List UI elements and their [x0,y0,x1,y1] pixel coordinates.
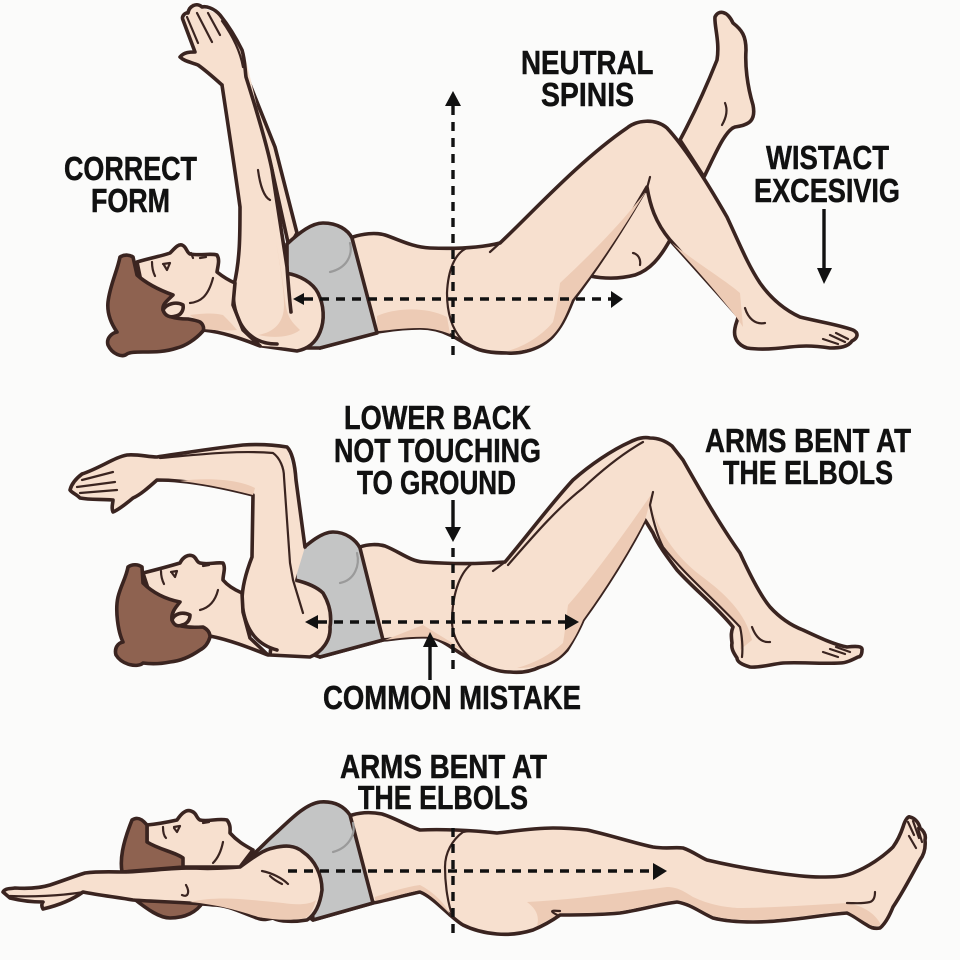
down arrow, figure 2 [445,500,461,542]
finger and arm lines [77,452,303,613]
figure 3: lying flat [3,802,925,934]
arm outline [70,445,305,650]
shoulder [270,580,331,657]
far arm [247,77,297,247]
label: correct form: FORM [91,182,170,219]
label: arms bent at the elbols, lower: THE ELBOLS [358,779,528,816]
jaw and face details [152,253,213,303]
arm fill [70,445,305,650]
head and neck [137,245,260,346]
ear [172,613,190,626]
hip and leg lines [452,442,850,660]
figure 2: common mistake [70,438,862,672]
hip, rib and foot details [447,177,848,344]
forearm shading [180,479,255,495]
horizontal axis, figure 3 [288,863,667,880]
arm outline [180,5,291,344]
finger and elbow lines [187,13,270,200]
hip, ankle and toe details [445,821,922,917]
far raised leg [680,12,754,177]
arm shading [258,205,300,337]
hair back [121,818,183,872]
label: lower back not touching to ground: NOT TOUCHING [334,432,541,469]
bra fold [340,553,358,583]
down arrow, figure 1 [817,209,832,284]
label: wistact excesivig: WISTACT [766,139,889,176]
label: arms bent at the elbols, upper: THE ELBOLS [723,454,893,491]
arm shading [190,898,316,920]
hair lower [133,898,203,918]
far thigh and calf [590,187,670,278]
shoulder [262,273,323,351]
label: correct form: CORRECT [64,150,197,187]
torso and bent leg [300,438,862,672]
bra fold [333,823,354,852]
label: lower back not touching to ground: TO GROUND [357,464,516,501]
hair [115,565,210,665]
label: common mistake: COMMON MISTAKE [323,679,581,716]
leg shading [385,492,752,668]
neck shading [190,314,237,330]
head and neck [147,811,253,867]
horizontal axis, figure 1 [293,291,623,308]
hair [108,255,204,356]
vertical axis, figure 3 [451,828,455,936]
vertical axis, figure 1 [445,91,461,355]
horizontal axis, figure 2 [305,614,579,630]
raised arm [70,445,305,650]
torso and near leg [300,121,857,353]
label: neutral spinis: NEUTRAL [521,44,653,81]
arm details [10,871,288,896]
label: lower back not touching to ground: LOWER BACK [344,399,531,436]
bra [240,802,373,920]
ear [163,303,183,317]
bra [287,223,377,348]
label: wistact excesivig: EXCESIVIG [754,172,900,209]
near arm [180,3,300,348]
thigh and calf shading [377,190,743,351]
bra fold [330,243,351,272]
torso and legs [240,813,925,934]
arm fill [180,3,297,348]
label: arms bent at the elbols, lower: ARMS BENT AT [340,748,547,785]
head and neck [143,555,268,655]
label: arms bent at the elbols, upper: ARMS BENT AT [705,422,911,459]
bra [295,532,383,657]
leg shading [375,885,881,926]
far ankle details [722,103,726,125]
vertical axis, figure 2 [451,548,455,672]
figure 1: correct form [108,3,857,356]
outstretched arm [3,846,322,921]
jaw and face details [161,565,218,610]
face details [163,822,223,863]
label: neutral spinis: SPINIS [541,76,634,113]
up arrow, figure 2 [423,632,438,680]
